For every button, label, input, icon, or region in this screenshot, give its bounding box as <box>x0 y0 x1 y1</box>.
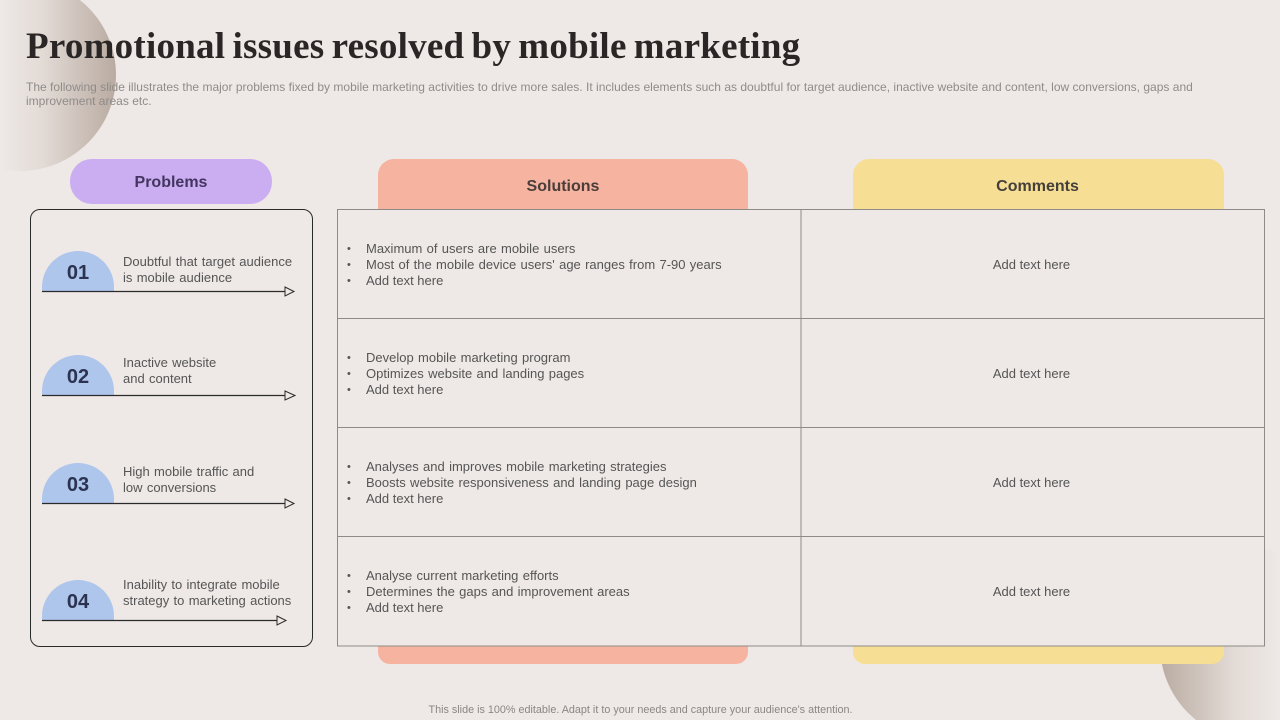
comment row 2: Add text here <box>993 366 1070 381</box>
solutions row 1 <box>347 241 722 288</box>
heading: Solutions <box>378 159 748 209</box>
number badge 01 <box>42 251 114 291</box>
arrow 01 <box>42 286 295 297</box>
heading: Comments <box>853 159 1224 209</box>
solutions row 2: Develop mobile marketing program <box>366 350 570 365</box>
footer note: This slide is 100% editable. Adapt it to your needs and capture your audience's attention. <box>428 704 852 716</box>
solutions row 4: Determines the gaps and improvement areas <box>366 584 630 599</box>
number badge 01: 01 <box>67 262 89 284</box>
problem text 01: Doubtful that target audience <box>123 254 292 269</box>
solutions row 2 <box>347 350 584 397</box>
subtitle text: The following slide illustrates the major problems fixed by mobile marketing activities to drive more sales. It includes elements such as doubtful for target audience, inactive website and content, low conversions, gaps and <box>26 80 1193 94</box>
comment row 1: Add text here <box>993 257 1070 272</box>
solutions row 4: Analyse current marketing efforts <box>366 568 559 583</box>
heading: Solutions: Solutions <box>527 178 599 195</box>
problem text 04: strategy to marketing actions <box>123 593 291 608</box>
problem text 03: low conversions <box>123 480 216 495</box>
problem text 04 <box>123 577 291 608</box>
number badge 03: 03 <box>67 474 89 496</box>
solutions row 3: Boosts website responsiveness and landing page design <box>366 475 697 490</box>
arrow 03 <box>42 498 295 509</box>
heading: Comments: Comments <box>996 178 1079 195</box>
solutions row 2: Optimizes website and landing pages <box>366 366 584 381</box>
problem text 02: and content <box>123 371 192 386</box>
problem text 04: Inability to integrate mobile <box>123 577 280 592</box>
title: Promotional issues resolved by mobile marketing <box>26 26 800 67</box>
number badge 02 <box>42 355 114 395</box>
comments bottom tab <box>853 646 1224 664</box>
solutions row 2: Add text here <box>366 382 443 397</box>
problem 04 <box>42 577 291 626</box>
problem text 02 <box>123 355 216 386</box>
arrow 02 <box>42 390 296 401</box>
problem text 01 <box>123 254 292 285</box>
solutions row 4 <box>347 568 630 615</box>
comment row 4: Add text here <box>993 584 1070 599</box>
solutions row 1: Most of the mobile device users' age ranges from 7-90 years <box>366 257 722 272</box>
problem text 02: Inactive website <box>123 355 216 370</box>
table grid <box>337 209 1265 646</box>
solutions bottom tab <box>378 646 748 664</box>
problem text 03: High mobile traffic and <box>123 464 254 479</box>
problem 01 <box>42 251 295 297</box>
comment row 3: Add text here <box>993 475 1070 490</box>
solutions row 3 <box>347 459 697 506</box>
problem 02 <box>42 355 296 401</box>
heading: Problems: Problems <box>135 174 207 191</box>
number badge 04: 04 <box>67 591 89 613</box>
subtitle text: improvement areas etc. <box>26 94 152 108</box>
solutions row 1: Maximum of users are mobile users <box>366 241 575 256</box>
solutions row 3: Analyses and improves mobile marketing strategies <box>366 459 666 474</box>
solutions row 3: Add text here <box>366 491 443 506</box>
heading: Problems <box>70 159 272 204</box>
problem text 01: is mobile audience <box>123 270 232 285</box>
problem 03 <box>42 463 295 509</box>
solutions row 1: Add text here <box>366 273 443 288</box>
decorative circle: top left <box>0 0 116 171</box>
number badge 04 <box>42 580 114 620</box>
number badge 03 <box>42 463 114 503</box>
arrow 04 <box>42 615 287 626</box>
problem text 03 <box>123 464 254 495</box>
number badge 02: 02 <box>67 366 89 388</box>
decorative circle: bottom right <box>1160 549 1280 720</box>
subtitle text <box>26 80 1193 108</box>
panel: problems <box>30 209 313 647</box>
solutions row 4: Add text here <box>366 600 443 615</box>
